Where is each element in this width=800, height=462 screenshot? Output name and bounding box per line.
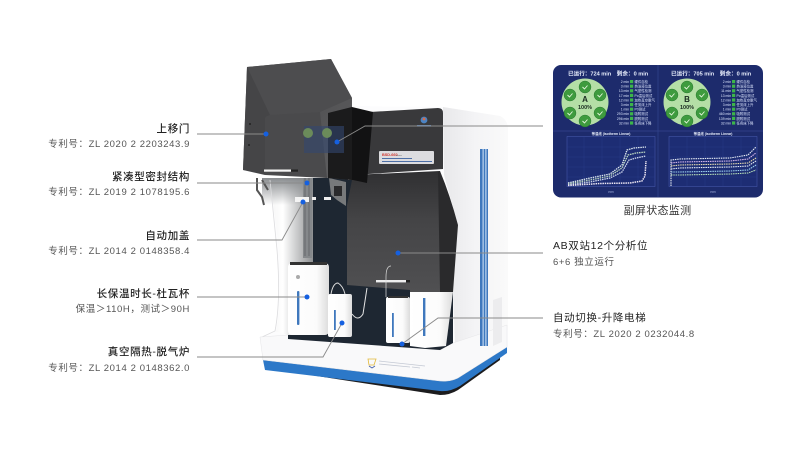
base logo and small print	[368, 359, 425, 368]
station B step list: 吸附测试	[736, 111, 751, 116]
cup 3	[386, 296, 410, 343]
upper front panel	[353, 108, 443, 175]
cup 2	[328, 283, 367, 337]
station A step list: 加热真空脱气	[634, 97, 655, 102]
station A step list: 3 min	[621, 85, 629, 89]
station B step list: 12 min	[721, 98, 731, 102]
station B step list: P0测试	[736, 107, 748, 112]
chart B: 等温线 (Isotherm Linear)	[694, 131, 732, 136]
station B step list: Po温后测试	[736, 93, 755, 98]
reflected screen	[303, 126, 344, 153]
side blue stripes	[480, 149, 488, 346]
station A step list: 12 min	[619, 98, 629, 102]
cup 4	[410, 292, 453, 348]
station B step list: 任务床下降	[736, 120, 754, 125]
label: degas furnace: 真空隔热-脱气炉	[108, 345, 190, 358]
station A step list: 1 min	[621, 108, 629, 112]
instrument illustration	[243, 59, 508, 395]
station A step list: 硬件自检	[634, 79, 649, 84]
label: degas furnace	[48, 345, 190, 374]
model sticker: series	[396, 154, 403, 157]
label: auto capping: 自动加盖	[145, 229, 190, 242]
label: AB stations: 6+6 独立运行	[553, 256, 615, 268]
door glass side	[328, 107, 373, 183]
station B step list: 脱附测试	[736, 116, 751, 121]
station A step list	[617, 79, 655, 125]
label: auto capping: 专利号：ZL 2014 2 0148358.4	[48, 245, 190, 257]
label: compact seal: 紧凑型密封结构	[112, 170, 190, 183]
model sticker	[379, 151, 434, 164]
label: AB stations	[553, 239, 648, 268]
label: upper door: 专利号：ZL 2020 2 2203243.9	[48, 138, 190, 150]
cup 1	[288, 262, 329, 335]
station A step list: 任务床上升	[634, 102, 652, 107]
station B step list: 热浴液位监	[736, 84, 754, 89]
station B step list: 3 min	[723, 85, 731, 89]
station B step list: 32 min	[721, 121, 731, 125]
label: upper door: 上移门	[157, 122, 190, 135]
station A step list: 任务床下降	[634, 120, 652, 125]
station A step list: 296 min	[617, 117, 629, 121]
station A step list: 32 min	[619, 121, 629, 125]
label: compact seal: 专利号：ZL 2019 2 1078195.6	[48, 186, 190, 198]
station B dial: 100%	[680, 105, 694, 111]
model sticker: BSD-660	[382, 153, 398, 157]
interior chamber	[288, 178, 453, 350]
station B step list: 11 min	[721, 89, 731, 93]
chart A	[567, 131, 655, 194]
station B step list: 1 min	[723, 108, 731, 112]
label: upper door	[48, 122, 190, 150]
station A step list: 2 min	[621, 80, 629, 84]
station A step list: 3 min	[621, 103, 629, 107]
station B step list: 13 min	[721, 94, 731, 98]
lift column and rods	[295, 178, 346, 258]
label: dewar: 长保温时长-杜瓦杯	[97, 287, 190, 300]
label: auto capping	[48, 229, 190, 257]
station B step list: 硬件自检	[736, 79, 751, 84]
chart A: 等温线 (Isotherm Linear)	[592, 131, 630, 136]
station A step list: 吸附测试	[634, 111, 649, 116]
label: elevator: 自动切换-升降电梯	[553, 311, 646, 324]
marker dots	[264, 132, 404, 346]
station B step list: 460 min	[719, 112, 731, 116]
station B step list: 气密性检测	[736, 88, 754, 93]
station A step list: 17 min	[619, 94, 629, 98]
screen caption: 副屏状态监测	[624, 203, 691, 217]
base with blue band	[260, 325, 507, 395]
side vent	[493, 297, 502, 346]
station B step list: 任务床上升	[736, 102, 754, 107]
upper sliding door	[243, 59, 352, 205]
label: AB stations: AB双站12个分析位	[553, 239, 648, 252]
label: dewar	[76, 287, 190, 315]
station A step list: 13 min	[619, 89, 629, 93]
label: elevator	[553, 311, 695, 340]
station B step list: 3 min	[723, 103, 731, 107]
station B dial: B	[684, 95, 690, 104]
station B dial	[664, 78, 710, 127]
chart B	[669, 131, 757, 194]
label: degas furnace: 专利号：ZL 2014 2 0148362.0	[48, 362, 190, 374]
station A step list: 热浴液位监	[634, 84, 652, 89]
station A step list: Po温后测试	[634, 93, 653, 98]
label: compact seal	[48, 170, 190, 198]
panel: secondary screen	[553, 65, 763, 198]
label: elevator: 专利号：ZL 2020 2 0232044.8	[553, 328, 695, 340]
station B step list	[719, 79, 757, 125]
station A dial: 100%	[578, 105, 592, 111]
station A step list: P0测试	[634, 107, 646, 112]
label: dewar: 保温＞110H，测试＞90H	[76, 303, 190, 315]
station B header: 已运行：705 min 剩余：0 min	[671, 70, 752, 78]
station A header: 已运行：724 min 剩余：0 min	[568, 70, 649, 78]
station A step list: 293 min	[617, 112, 629, 116]
chart A: P/P0	[608, 190, 614, 194]
lower door	[347, 171, 458, 297]
sample cups	[288, 262, 453, 348]
station A dial	[562, 78, 608, 127]
main white body	[262, 106, 508, 385]
station A step list: 气密性检测	[634, 88, 652, 93]
station A step list: 脱附测试	[634, 116, 649, 121]
station A dial: A	[582, 95, 588, 104]
station B step list: 139 min	[719, 117, 731, 121]
chart B: P/P0	[710, 190, 716, 194]
leader lines	[197, 126, 543, 357]
station B step list: 2 min	[723, 80, 731, 84]
station B step list: 加热真空脱气	[736, 97, 757, 102]
